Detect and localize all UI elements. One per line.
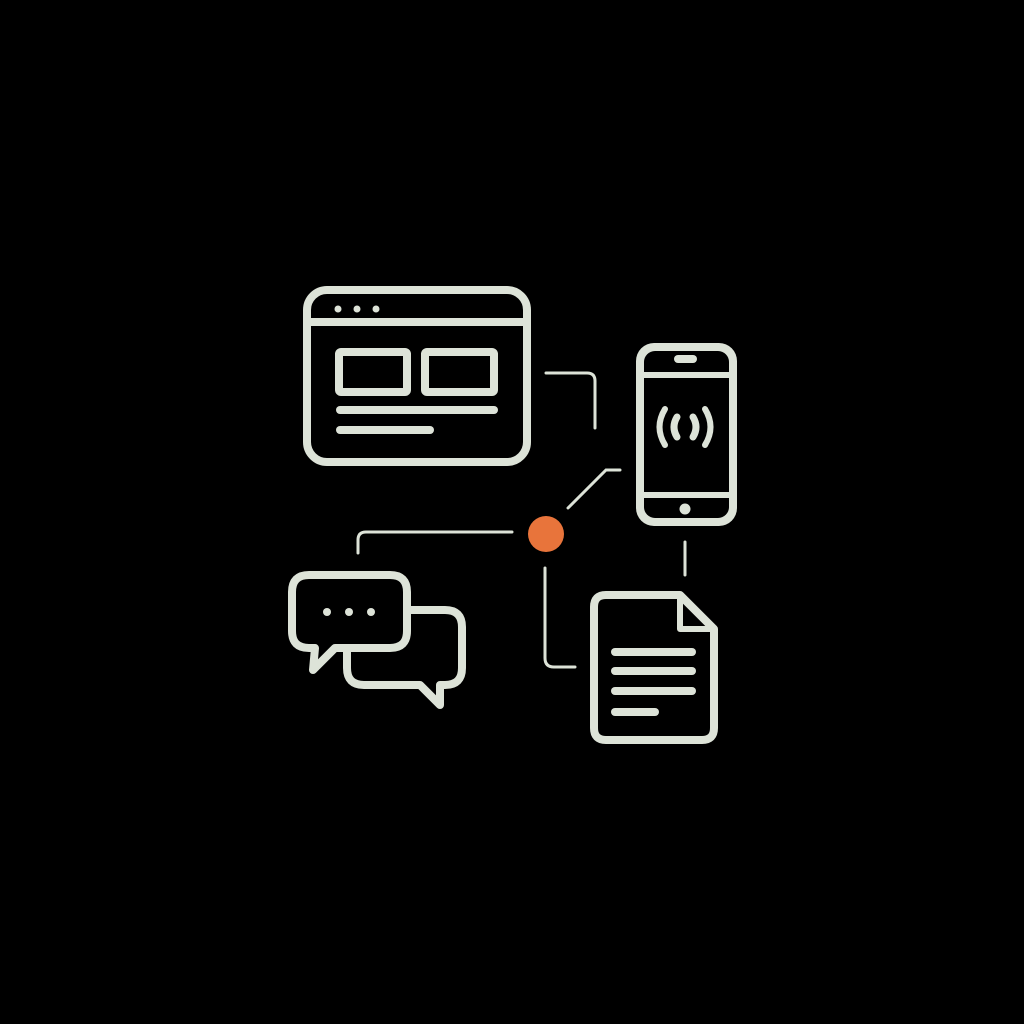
connectors (358, 373, 685, 667)
icon: wireless signal (660, 409, 710, 445)
icon: smartphone (636, 343, 737, 526)
hub: orange dot (528, 516, 564, 552)
icon: browser window (307, 290, 527, 462)
icon: document (594, 595, 714, 740)
icon: chat bubbles (292, 575, 462, 705)
